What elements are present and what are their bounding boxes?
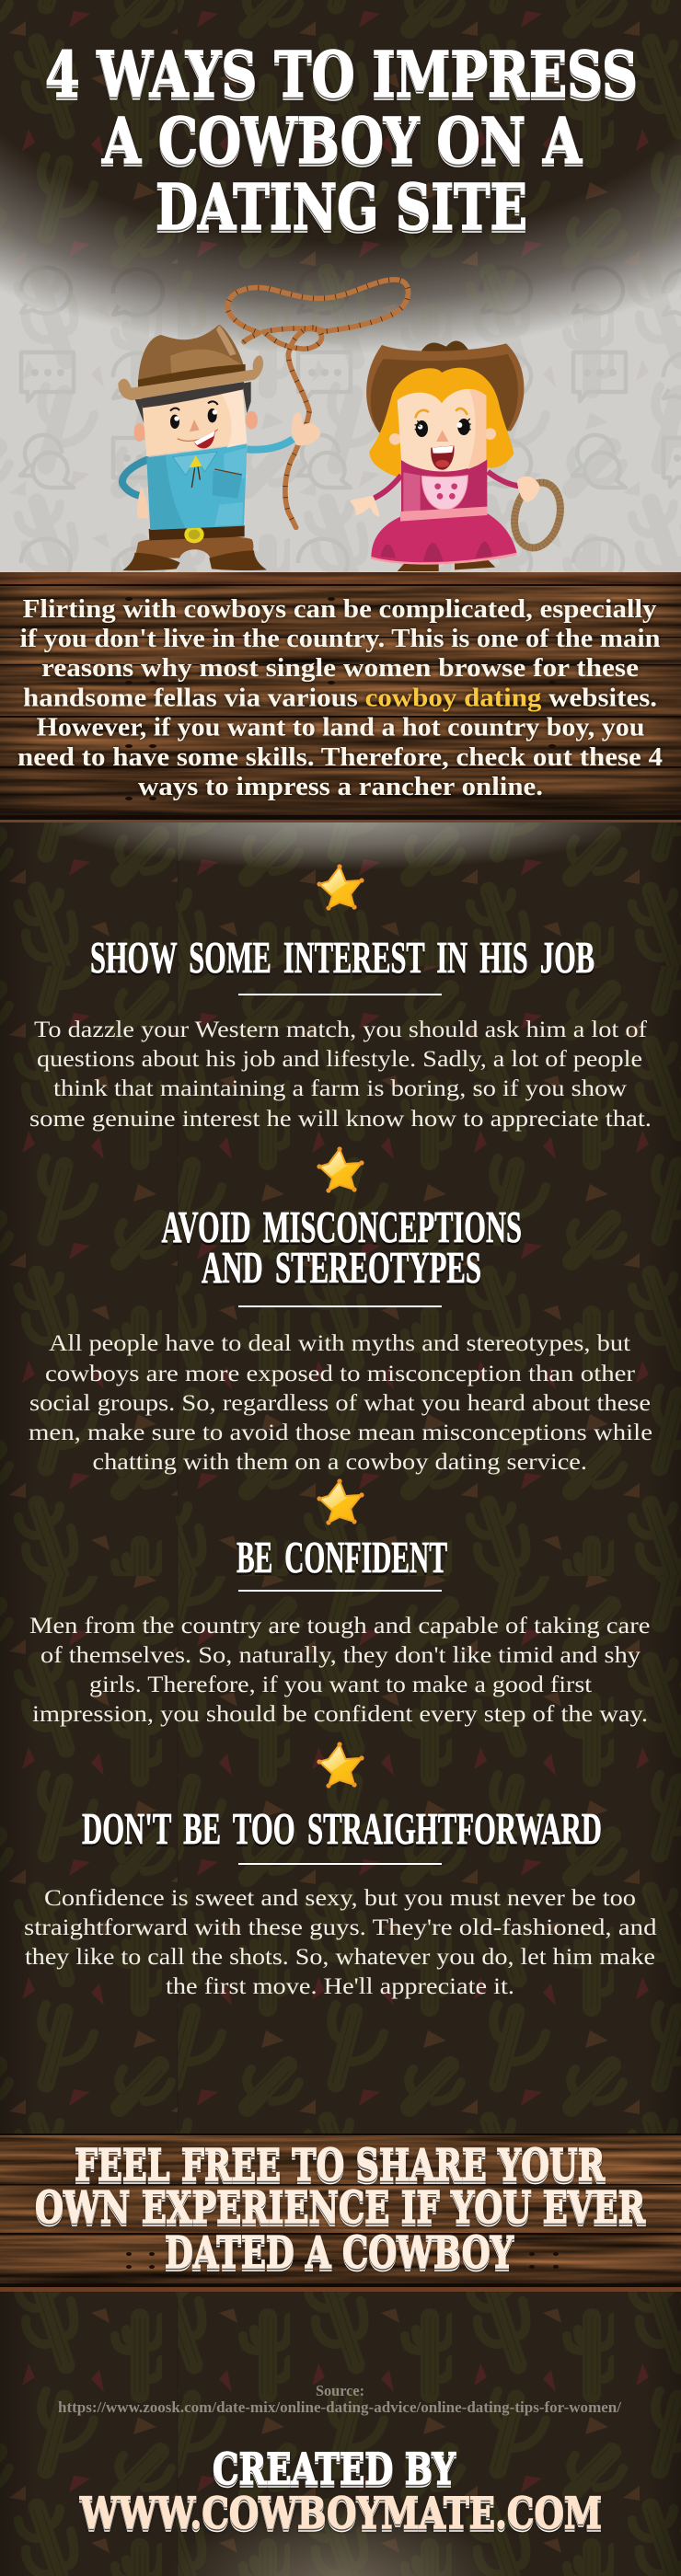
- cowboy shirt: [146, 444, 247, 530]
- text block 4: Confidence is sweet and sexy, but you must never be too: [44, 1886, 636, 1911]
- text block 2: [29, 1331, 652, 1475]
- text block 1: think that maintaining a farm is boring, so if you show: [53, 1076, 627, 1101]
- text block 2: social groups. So, regardless of what you heard about these: [29, 1391, 651, 1416]
- source note: https://www.zoosk.com/date-mix/online-dating-advice/online-dating-tips-for-women/: [58, 2398, 621, 2416]
- cowboy belt and buckle: [149, 525, 245, 543]
- illustration: cowboy: [118, 325, 320, 570]
- panel: closing wood plank: [0, 2133, 681, 2292]
- title: DATING SITE: [156, 171, 527, 245]
- panel: hero background: [0, 0, 681, 594]
- closing call to action: DATED A COWBOY: [165, 2227, 514, 2279]
- illustration: cowgirl: [350, 340, 567, 571]
- text block 3: of themselves. So, naturally, they don't like timid and shy: [40, 1643, 641, 1668]
- text block 4: the first move. He'll appreciate it.: [166, 1974, 514, 1999]
- cowboy hat: [118, 325, 263, 400]
- text block 2: All people have to deal with myths and stereotypes, but: [49, 1331, 630, 1356]
- cowgirl boots: [398, 559, 495, 571]
- text block 2: chatting with them on a cowboy dating service.: [92, 1450, 587, 1475]
- panel: dark cactus background sections: [0, 756, 681, 2576]
- created by credit: CREATED BY: [213, 2444, 456, 2495]
- text block 2: men, make sure to avoid those mean misconceptions while: [29, 1420, 652, 1445]
- intro text: [17, 595, 663, 801]
- intro text: However, if you want to land a hot country boy, you: [37, 714, 645, 742]
- cowboy legs and boots: [122, 536, 267, 570]
- heading: avoid misconceptions: AND STEREOTYPES: [202, 1242, 481, 1293]
- intro text: if you don't live in the country. This is one of the main: [20, 625, 661, 653]
- text block 1: [29, 1018, 652, 1132]
- intro text: Flirting with cowboys can be complicated, especially: [22, 595, 657, 624]
- panel: intro wood plank: [0, 572, 681, 822]
- text block 3: impression, you should be confident every step of the way.: [32, 1702, 648, 1727]
- text block 3: Men from the country are tough and capable of taking care: [29, 1614, 650, 1639]
- cowgirl dress: [371, 459, 517, 565]
- illustration: lasso rope: [227, 280, 409, 527]
- text block 3: [29, 1614, 650, 1727]
- text block 1: questions about his job and lifestyle. Sadly, a lot of people: [37, 1047, 642, 1072]
- text block 4: they like to call the shots. So, whatever you do, let him make: [25, 1945, 655, 1970]
- icon: star 2: [317, 1146, 364, 1193]
- title: [45, 39, 638, 245]
- intro text: need to have some skills. Therefore, check out these 4: [17, 743, 663, 772]
- cowgirl arms and hands: [350, 472, 540, 517]
- intro text: reasons why most single women browse for these: [41, 654, 639, 683]
- icon: star 1: [317, 864, 364, 911]
- heading: avoid misconceptions: [162, 1202, 522, 1293]
- cowgirl head: [389, 389, 496, 471]
- text block 4: straightforward with these guys. They're old-fashioned, and: [24, 1915, 657, 1940]
- cowgirl hair: [370, 368, 514, 477]
- text block 2: cowboys are more exposed to misconception than other: [45, 1362, 636, 1386]
- source note: [58, 2382, 621, 2416]
- heading: be confident: BE CONFIDENT: [237, 1532, 447, 1582]
- text block 4: [24, 1886, 657, 1999]
- intro text: ways to impress a rancher online.: [138, 773, 543, 801]
- text block 1: some genuine interest he will know how to appreciate that.: [29, 1107, 652, 1132]
- intro text: handsome fellas via various cowboy dating websites.: [23, 684, 657, 712]
- source note: Source:: [316, 2382, 364, 2399]
- cowboy head: [134, 382, 258, 456]
- closing call to action: [35, 2140, 645, 2279]
- text block 3: girls. Therefore, if you want to make a good first: [89, 1673, 592, 1697]
- cowboy arms and hands: [122, 412, 320, 518]
- created by credit: [79, 2444, 602, 2539]
- icon: star 3: [317, 1478, 364, 1525]
- cowgirl lasso: [508, 477, 567, 553]
- icon: star 4: [317, 1742, 364, 1788]
- cowgirl hat: [366, 340, 524, 435]
- text block 1: To dazzle your Western match, you should ask him a lot of: [34, 1018, 648, 1042]
